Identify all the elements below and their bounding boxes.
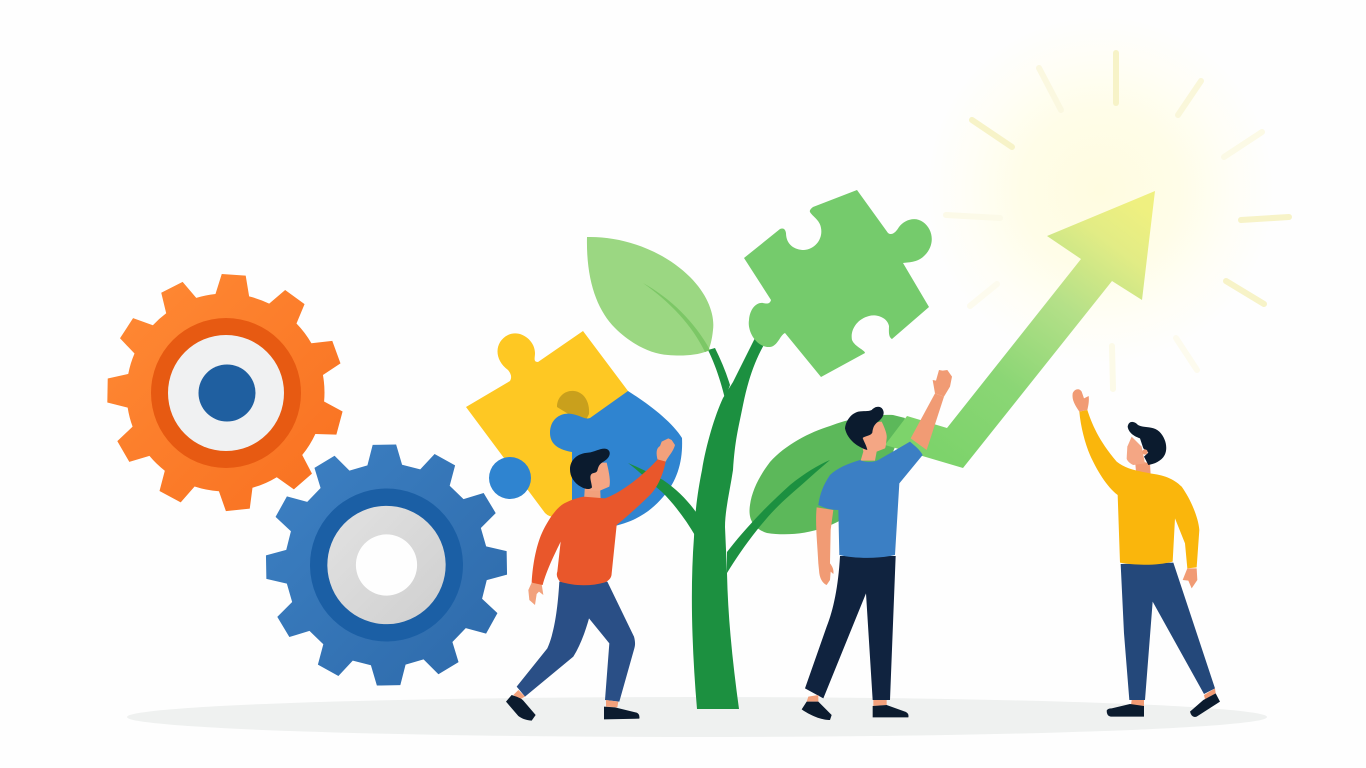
person in yellow sweater [1072, 389, 1220, 717]
face [1127, 437, 1145, 465]
leaf vein [643, 283, 710, 352]
sweater [532, 459, 666, 585]
ankles [1131, 700, 1144, 706]
trousers [1121, 563, 1215, 700]
blue puzzle knob [489, 457, 531, 499]
yellow puzzle piece [466, 331, 640, 517]
hair [1128, 422, 1166, 465]
shoes [802, 702, 832, 720]
ankles [513, 690, 525, 699]
left arm [816, 507, 833, 585]
face [589, 463, 610, 491]
gear face [168, 335, 284, 451]
trunk and main branch [692, 338, 765, 709]
raised arm [911, 393, 944, 450]
trousers [517, 582, 635, 702]
gear body [107, 274, 343, 512]
top leaf [587, 237, 713, 356]
ankles [807, 695, 818, 702]
hair [570, 449, 610, 489]
yellow puzzle socket [557, 391, 589, 420]
right lower branch and leaf vein [727, 460, 830, 573]
right leaf [750, 415, 905, 534]
lower hand [528, 583, 543, 605]
leaf blade [587, 237, 713, 356]
green puzzle piece [744, 190, 932, 377]
ear [1142, 449, 1148, 455]
orange gear [107, 274, 343, 512]
gear ring [309, 487, 464, 643]
gear hub [198, 364, 256, 422]
sun glow [925, 15, 1275, 365]
plant stem [628, 338, 765, 709]
raised hand [933, 370, 952, 397]
neck [1135, 460, 1151, 475]
t-shirt [818, 442, 923, 558]
hair [845, 407, 884, 450]
neck [584, 485, 601, 500]
shoes [1107, 704, 1144, 717]
left lower branch [628, 463, 698, 537]
gear body [264, 443, 509, 687]
ground shadow [127, 697, 1267, 737]
gear hole [355, 534, 418, 596]
blue puzzle piece [550, 391, 682, 527]
upper hand [657, 438, 675, 462]
gear face [326, 505, 447, 625]
person in red sweater [506, 438, 675, 721]
trousers [805, 556, 896, 700]
lower hand [1183, 568, 1197, 588]
growth arrow [885, 191, 1155, 468]
blue gear [264, 443, 509, 687]
neck and face [860, 422, 887, 461]
upper small branch [708, 348, 730, 399]
shoes [506, 695, 536, 721]
sun rays [946, 53, 1289, 389]
sweater [1079, 410, 1199, 568]
gear ring [151, 318, 301, 468]
person in blue t-shirt [802, 370, 952, 720]
upper hand [1072, 389, 1089, 412]
illustration [107, 50, 1292, 737]
